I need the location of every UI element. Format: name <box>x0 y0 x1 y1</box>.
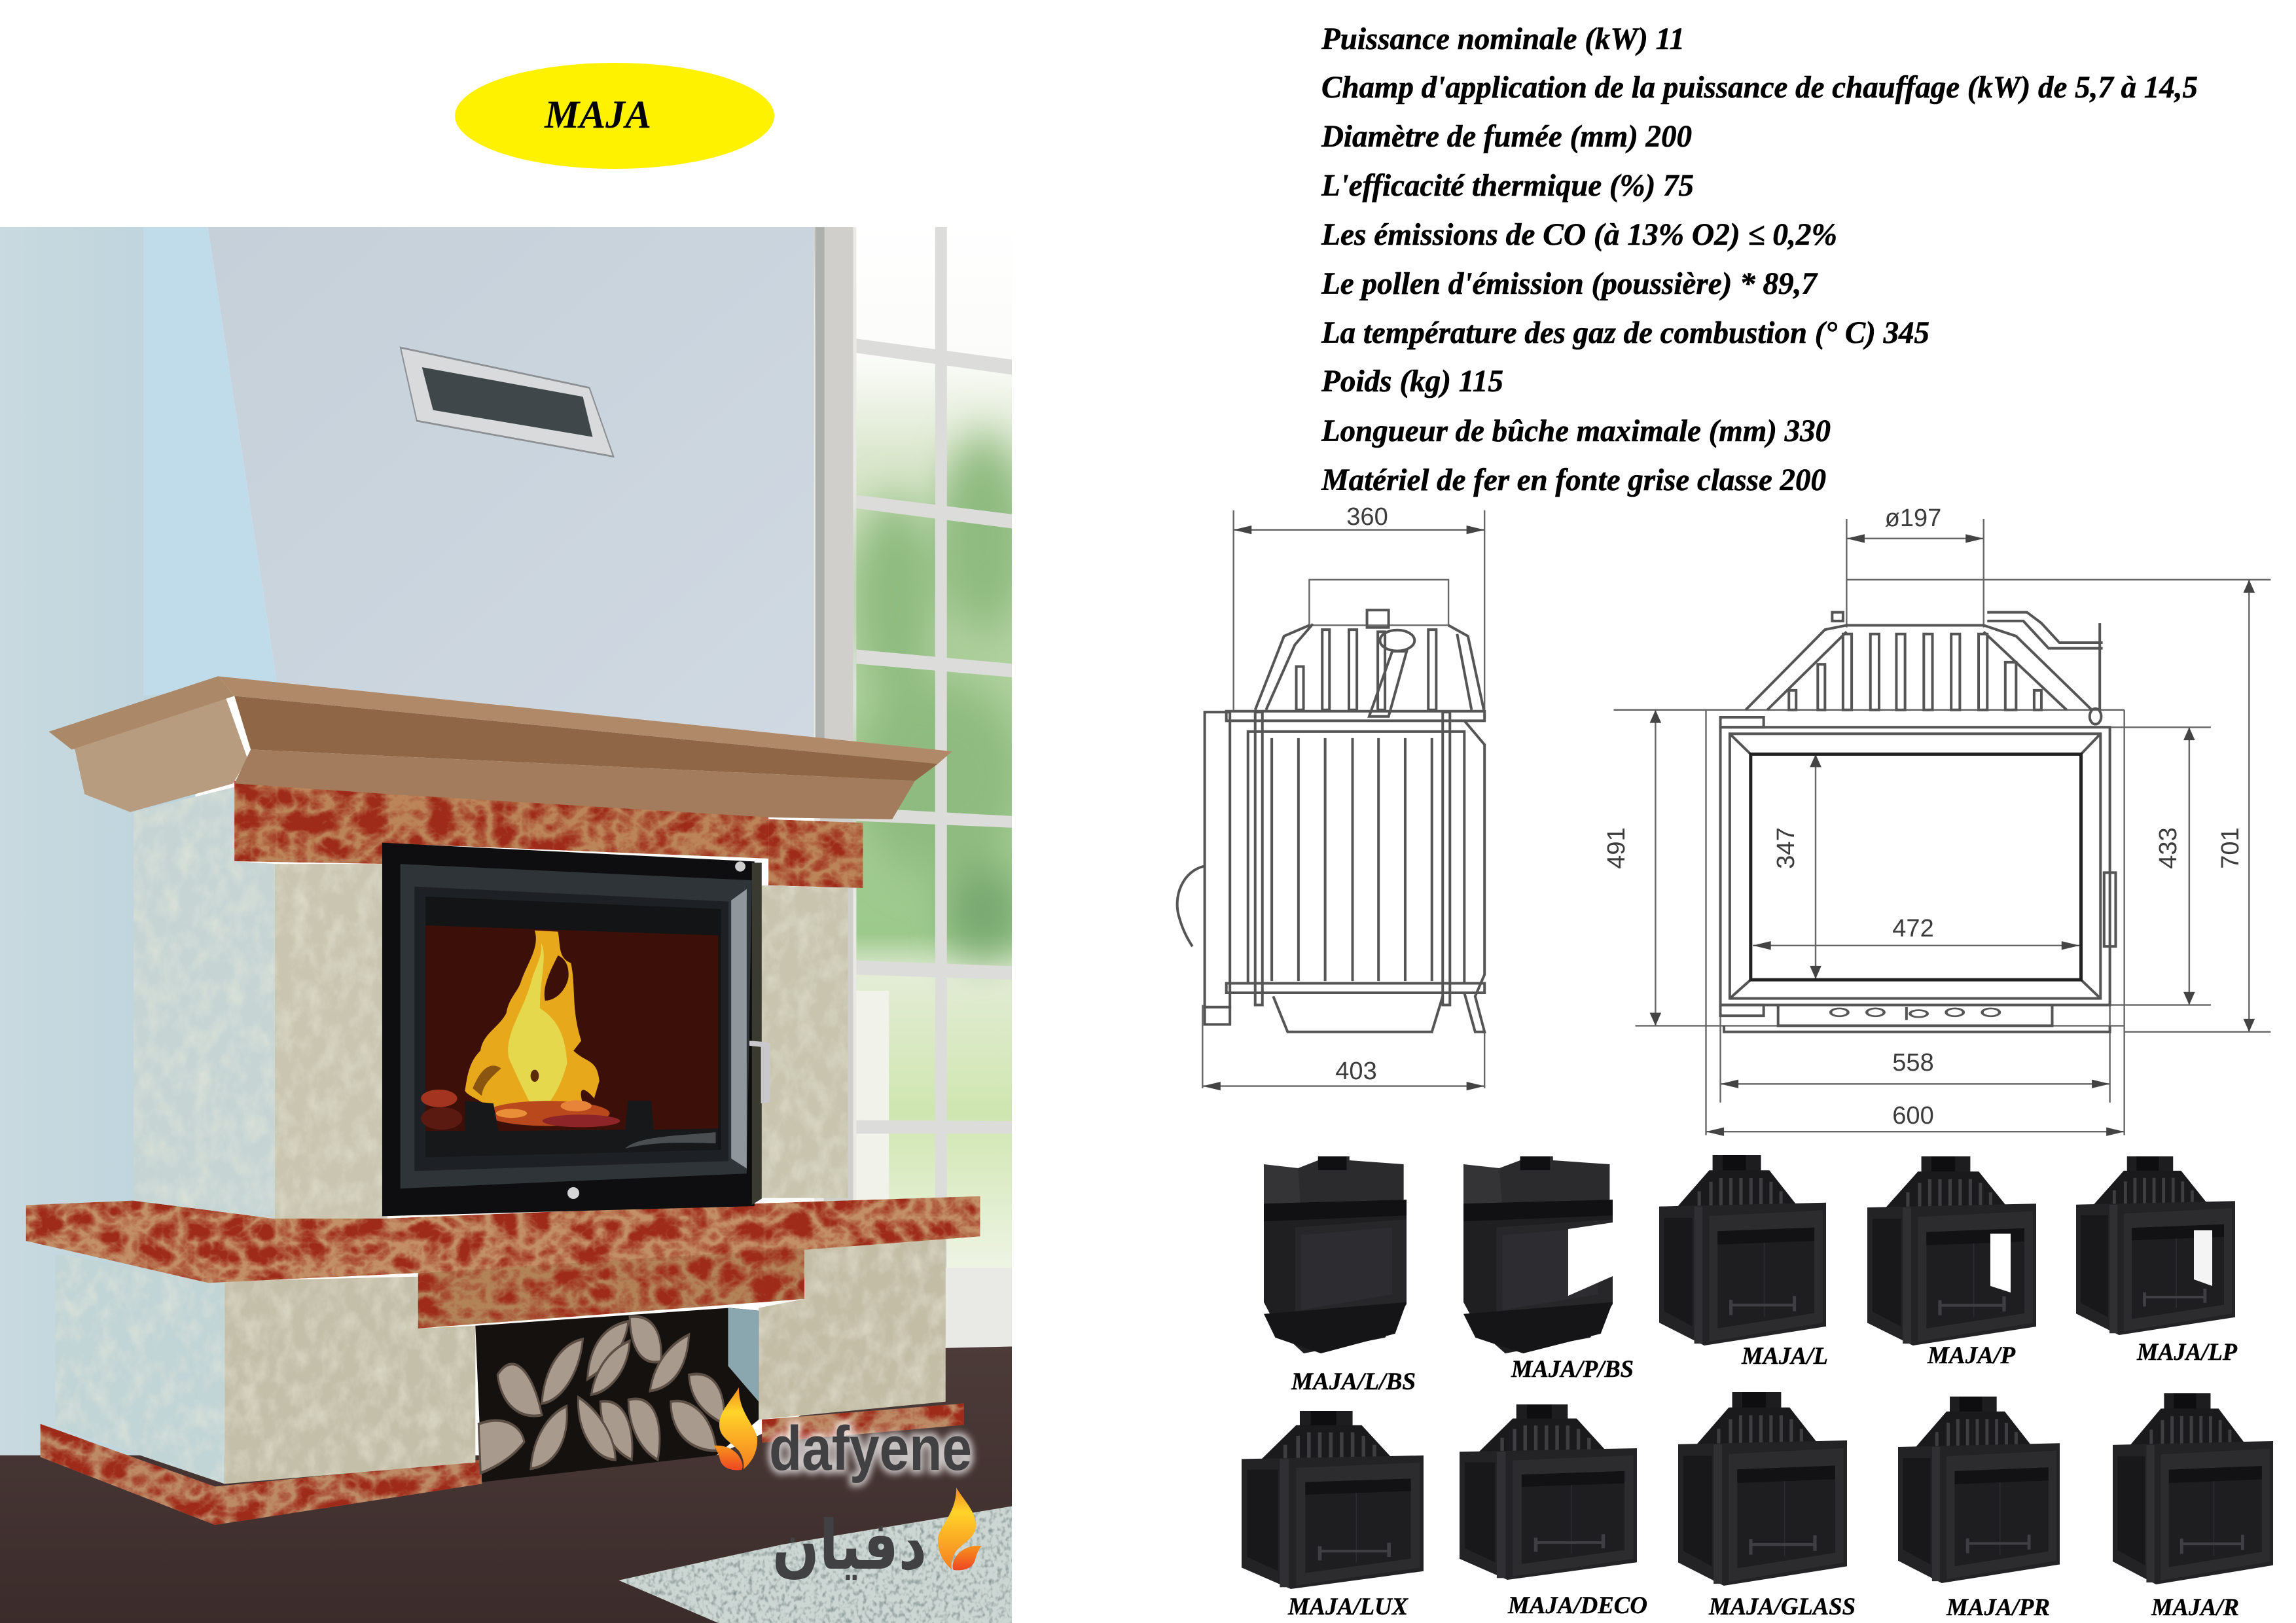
product: MAJA/P <box>1867 1156 2036 1369</box>
product: MAJA/L: MAJA/L <box>1741 1343 1828 1370</box>
specifications list: Le pollen d'émission (poussière) * 89,7 <box>1321 266 1818 301</box>
product: MAJA/DECO <box>1460 1404 1647 1619</box>
label 558: 558 <box>1892 1049 1934 1077</box>
window <box>814 227 1012 1348</box>
label 491: 491 <box>1603 827 1630 869</box>
stove front outline <box>1721 613 2115 1032</box>
chimney side face <box>143 223 277 696</box>
door reflective edge <box>731 889 747 1169</box>
wooden mantel <box>49 676 952 819</box>
specifications list: Diamètre de fumée (mm) 200 <box>1321 119 1692 154</box>
logo: arabic <box>772 1488 982 1585</box>
specifications list: Puissance nominale (kW) 11 <box>1321 22 1685 56</box>
floor <box>0 1346 1022 1623</box>
product: MAJA/DECO: MAJA/DECO <box>1507 1592 1647 1619</box>
rug <box>619 1505 1022 1623</box>
product: MAJA/L <box>1659 1155 1828 1370</box>
label 600: 600 <box>1892 1102 1934 1130</box>
specifications list: La température des gaz de combustion (° C) 345 <box>1321 315 1929 350</box>
specifications list: Champ d'application de la puissance de chauffage (kW) de 5,7 à 14,5 <box>1321 70 2198 105</box>
product: MAJA/LP: MAJA/LP <box>2136 1339 2237 1366</box>
product: MAJA/L/BS: MAJA/L/BS <box>1291 1368 1416 1395</box>
logo: arabic: دفيان <box>772 1506 927 1585</box>
product: MAJA/LP <box>2076 1156 2237 1366</box>
logo: dafyene latin: dafyene <box>769 1414 972 1484</box>
base moulding band <box>41 1404 964 1525</box>
product: MAJA/P/BS <box>1463 1156 1634 1383</box>
label 701: 701 <box>2217 827 2244 869</box>
product: MAJA/L/BS <box>1264 1156 1416 1395</box>
product: MAJA/GLASS: MAJA/GLASS <box>1708 1594 1856 1620</box>
product: MAJA/PR: MAJA/PR <box>1946 1594 2050 1621</box>
upper stone piers <box>134 787 848 1219</box>
specifications list: Les émissions de CO (à 13% O2) ≤ 0,2% <box>1321 217 1837 252</box>
right edge <box>752 863 762 1205</box>
label 403: 403 <box>1335 1058 1377 1085</box>
title badge: MAJA <box>455 63 774 169</box>
photo: fireplace in living room <box>0 223 1029 1623</box>
technical drawing: side view <box>1177 503 1484 1090</box>
left wall <box>0 223 195 1473</box>
lower stone base <box>56 1236 946 1484</box>
side body outline <box>1177 580 1484 1032</box>
marble band under mantel <box>234 781 863 888</box>
product: MAJA/GLASS <box>1678 1392 1856 1620</box>
product: MAJA/P/BS: MAJA/P/BS <box>1511 1356 1634 1383</box>
specifications list: Poids (kg) 115 <box>1321 364 1503 399</box>
technical drawing: front view <box>1603 505 2270 1136</box>
firebox back <box>425 925 718 1132</box>
label 433: 433 <box>2155 827 2182 869</box>
product: MAJA/P: MAJA/P <box>1927 1342 2015 1369</box>
outer black frame <box>382 843 755 1216</box>
product: MAJA/R <box>2113 1393 2273 1621</box>
specifications list <box>1321 22 2198 497</box>
log niche <box>475 1308 759 1482</box>
product: MAJA/R: MAJA/R <box>2151 1594 2239 1621</box>
product: MAJA/LUX <box>1242 1411 1424 1620</box>
label 472: 472 <box>1892 915 1934 942</box>
label 347: 347 <box>1772 827 1800 869</box>
product: MAJA/LUX: MAJA/LUX <box>1287 1594 1408 1620</box>
handle <box>749 1041 770 1103</box>
title badge: MAJA: MAJA <box>544 93 651 136</box>
logo: dafyene latin <box>713 1387 972 1484</box>
door frame <box>401 864 752 1188</box>
specifications list: L'efficacité thermique (%) 75 <box>1321 168 1694 203</box>
logo: dafyene latin: dafyene <box>769 1414 972 1484</box>
dimension 360 lines <box>1202 510 1484 1090</box>
product: MAJA/PR <box>1898 1397 2060 1621</box>
specifications list: Longueur de bûche maximale (mm) 330 <box>1321 414 1831 448</box>
flames <box>465 931 600 1116</box>
label Ø197: ø197 <box>1885 505 1941 532</box>
glass <box>425 897 721 1157</box>
specifications list: Matériel de fer en fonte grise classe 200 <box>1321 463 1826 497</box>
dimension lines <box>1613 519 2270 1136</box>
grate <box>425 1101 718 1157</box>
chimney hood <box>207 223 824 749</box>
hearth slab <box>26 1196 980 1329</box>
label 360: 360 <box>1346 503 1388 531</box>
embers <box>421 1090 620 1130</box>
fireplace insert <box>382 843 770 1216</box>
knobs <box>735 861 745 872</box>
wall vent <box>401 348 613 457</box>
